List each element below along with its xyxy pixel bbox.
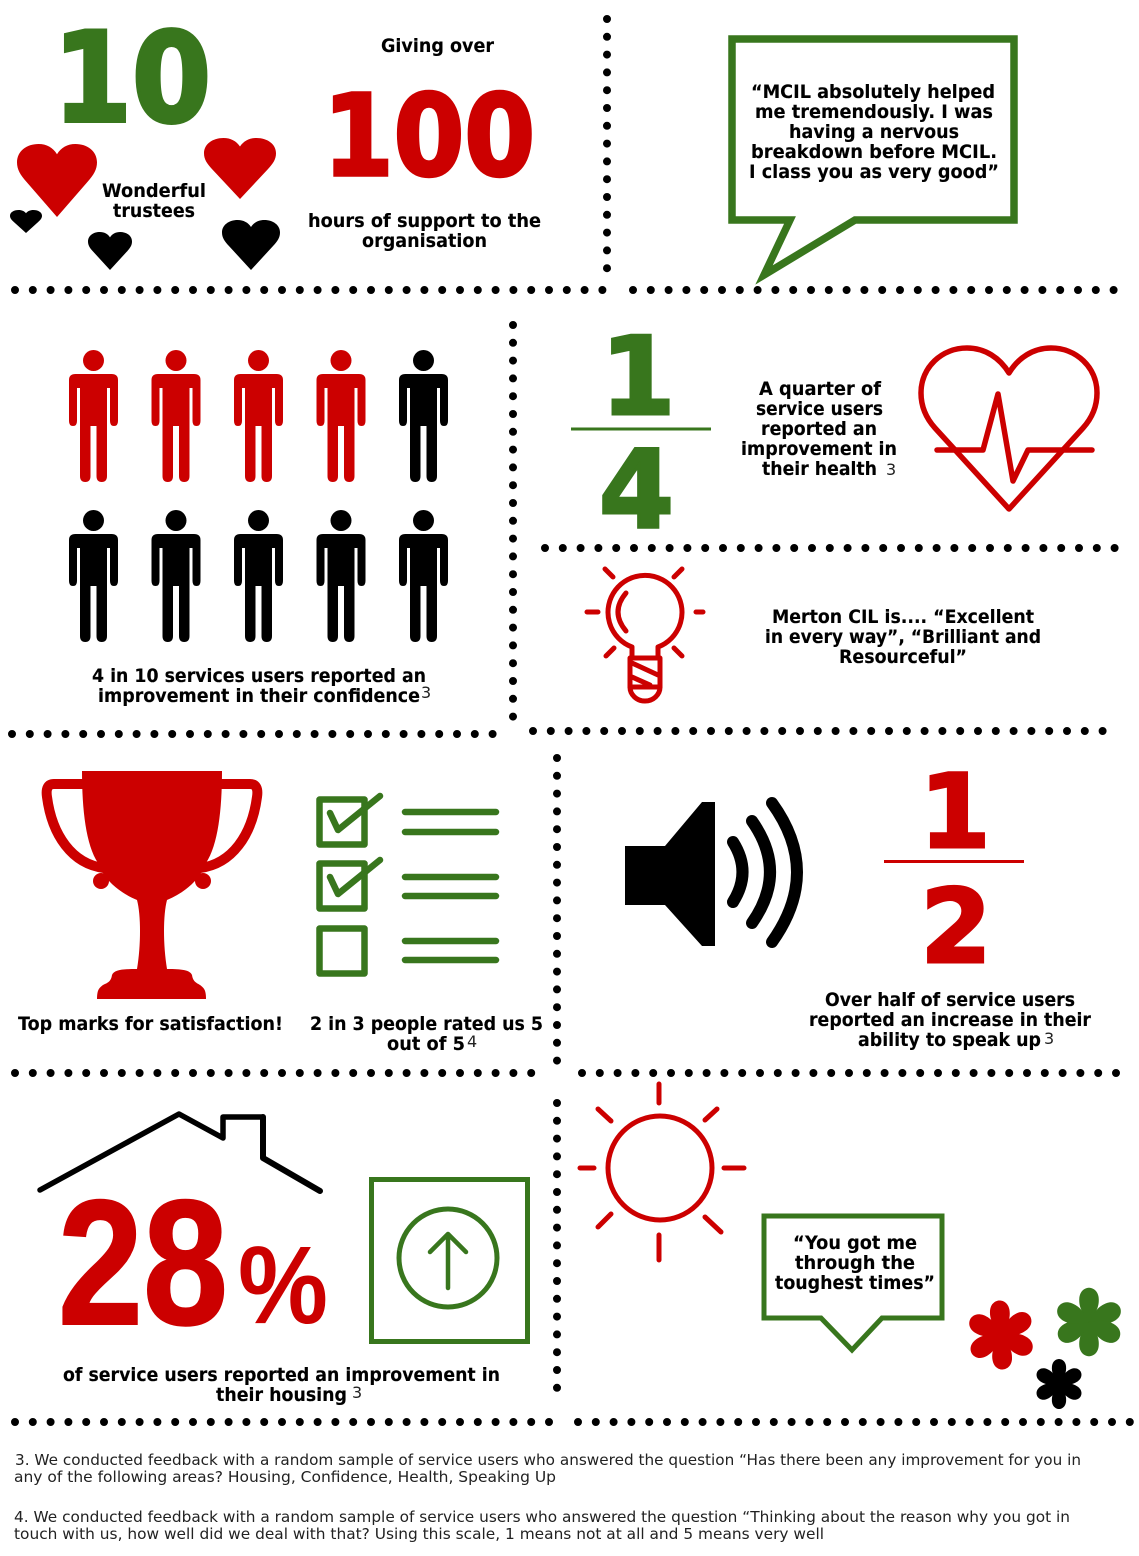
quote text — [749, 81, 999, 183]
icon: trophy — [47, 771, 257, 999]
text: confidence — [92, 665, 431, 707]
text: housing — [63, 1364, 500, 1406]
text: confidence: 3 — [421, 683, 431, 702]
footnote 3 — [14, 1451, 1081, 1486]
text: speak up: Over half of service users — [825, 989, 1075, 1011]
quote text — [775, 1232, 935, 1294]
icon: hearts — [10, 138, 280, 270]
panel: toughest times — [580, 1084, 1124, 1409]
panel: health — [571, 315, 1097, 554]
quote text: breakdown before MCIL. — [751, 141, 997, 163]
text: health: improvement in — [741, 438, 897, 460]
text: housing: their housing — [216, 1384, 347, 1406]
text: speak up: 3 — [1044, 1029, 1054, 1048]
text: rated us: 4 — [467, 1032, 477, 1051]
panel: 100 hours — [308, 35, 541, 252]
text: hours of support: organisation — [362, 230, 487, 252]
quote text: “MCIL absolutely helped — [751, 81, 995, 103]
icon: light bulb — [587, 569, 703, 701]
text: top marks: Top marks for satisfaction! — [18, 1013, 283, 1035]
fraction: one half: 1 — [920, 753, 990, 872]
text: health: reported an — [761, 418, 877, 440]
pictogram: people — [69, 350, 448, 642]
text: merton cil — [765, 606, 1041, 668]
quote text: I class you as very good” — [749, 161, 999, 183]
footnote 3: any of the following areas? Housing, Confidence, Health, Speaking Up — [14, 1468, 556, 1486]
number: 28 percent: 28 — [58, 1163, 228, 1362]
text: merton cil: in every way”, “Brilliant and — [765, 626, 1041, 648]
number: 10: 10 — [53, 7, 211, 151]
text: speak up — [809, 989, 1092, 1051]
quote text: “You got me — [793, 1232, 917, 1254]
text: wonderful trustees — [102, 180, 206, 222]
footnote 4: touch with us, how well did we deal with that? Using this scale, 1 means not at all and 5 means very well — [14, 1525, 824, 1543]
quote text: me tremendously. I was — [755, 101, 993, 123]
text: health: their health — [762, 458, 877, 480]
footnotes — [14, 1451, 1081, 1543]
icon: speaker — [625, 802, 797, 946]
text: merton cil: Resourceful” — [839, 646, 967, 668]
text: confidence: improvement in their confidence — [98, 685, 420, 707]
speech bubble — [732, 39, 1014, 275]
quote text: through the — [795, 1252, 915, 1274]
text: rated us: out of 5 — [387, 1033, 465, 1055]
icon: up arrow box — [372, 1180, 528, 1342]
fraction: one quarter — [571, 315, 711, 554]
panel: housing — [40, 1114, 528, 1406]
text: hours of support — [308, 210, 541, 252]
icon: sun — [580, 1084, 744, 1260]
text: housing: of service users reported an improvement in — [63, 1364, 500, 1386]
footnote 4: 4. We conducted feedback with a random sample of service users who answered the question “Thinking about the reason why you got in — [14, 1508, 1070, 1526]
text: rated us: 2 in 3 people rated us 5 — [310, 1013, 543, 1035]
fraction: one half: 2 — [921, 868, 991, 987]
quote text: having a nervous — [789, 121, 959, 143]
number: 28 percent: % — [238, 1224, 328, 1347]
text: speak up: reported an increase in their — [809, 1009, 1092, 1031]
text: speak up: ability to speak up — [858, 1029, 1041, 1051]
fraction: one quarter: 1 — [600, 315, 676, 440]
panel: trustees — [10, 7, 280, 270]
text: health: service users — [756, 398, 883, 420]
text: wonderful trustees: Wonderful — [102, 180, 206, 202]
text: hours of support: hours of support to the — [308, 210, 541, 232]
text: wonderful trustees: trustees — [113, 200, 195, 222]
text: housing: 3 — [352, 1383, 362, 1402]
text: giving over: Giving over — [381, 35, 495, 57]
quote text: toughest times” — [775, 1272, 935, 1294]
panel: excellent — [587, 569, 1041, 701]
text: health: 3 — [886, 460, 896, 479]
panel: speaking up — [625, 753, 1092, 1051]
fraction: one quarter: 4 — [599, 428, 674, 554]
icon: roof — [40, 1114, 320, 1191]
icon: heart with pulse — [921, 348, 1097, 509]
text: merton cil: Merton CIL is.... “Excellent — [772, 606, 1034, 628]
footnote 3: 3. We conducted feedback with a random sample of service users who answered the question “Has there been any improvement for you in — [15, 1451, 1081, 1469]
fraction: one half — [884, 753, 1024, 987]
number: 100: 100 — [323, 72, 535, 202]
panel: confidence — [69, 350, 448, 707]
speech bubble — [764, 1216, 942, 1350]
icon: checklist — [320, 796, 496, 974]
panel: satisfaction — [18, 771, 543, 1055]
text: rated us — [310, 1013, 543, 1055]
footnote 4 — [14, 1508, 1070, 1543]
text: health — [741, 378, 897, 480]
icon: flowers — [964, 1288, 1124, 1409]
panel: quote bubble — [732, 39, 1014, 275]
text: health: A quarter of — [759, 378, 882, 400]
text: confidence: 4 in 10 services users reported an — [92, 665, 426, 687]
